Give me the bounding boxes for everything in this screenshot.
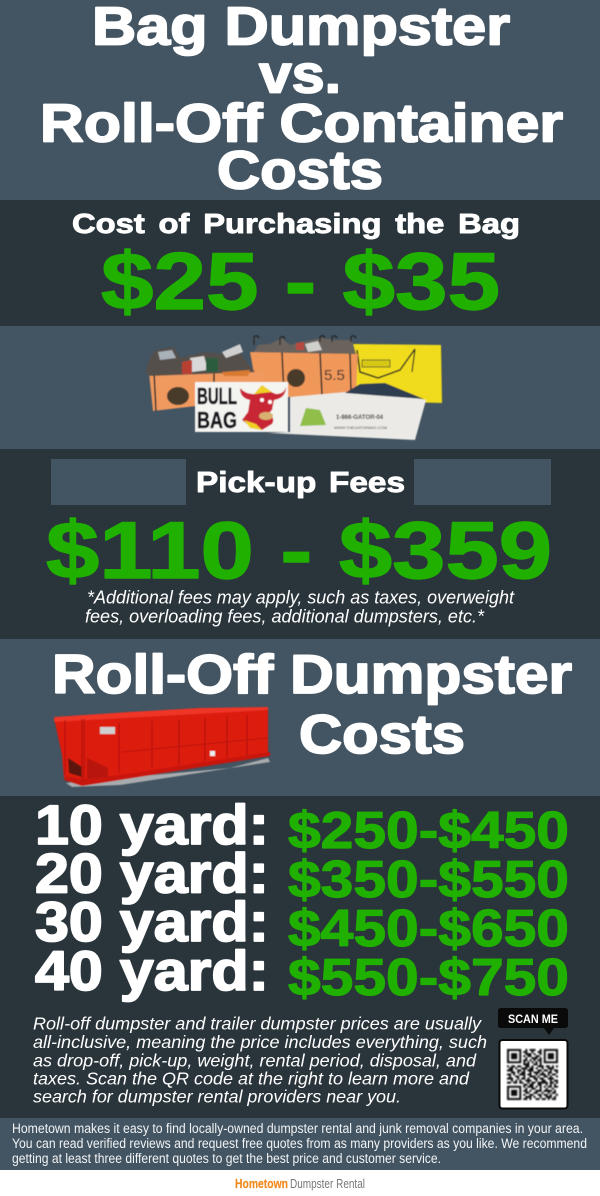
bag handles and contents	[254, 338, 356, 354]
heading: bag dumpster vs roll-off container costs: vs.	[259, 44, 341, 104]
note: additional fees	[85, 588, 515, 626]
row: 20 yard: $350-$550	[288, 851, 569, 909]
image: collection of dumpster bags: 5.5	[324, 367, 345, 384]
panel: bag photo band	[0, 326, 600, 449]
text block: roll-off explanation: Roll-off dumpster and trailer dumpster prices are usually	[33, 1014, 482, 1034]
price: bag cost: $25 - $35	[101, 237, 500, 327]
row: 40 yard	[35, 939, 569, 1007]
row: 10 yard: $250-$450	[288, 802, 569, 860]
heading: cost of purchasing: Cost of Purchasing the Bag	[72, 208, 520, 239]
image: collection of dumpster bags: BAG	[197, 407, 237, 433]
image: red roll-off dumpster	[54, 707, 270, 787]
text block: roll-off explanation: search for dumpster rental providers near you.	[33, 1086, 401, 1106]
panel: pick-up fees	[0, 449, 600, 639]
row: 10 yard	[35, 793, 569, 860]
text block: roll-off explanation: all-inclusive, meaning the price includes everything, such	[33, 1032, 487, 1052]
bull bag logo	[195, 382, 288, 432]
junk pile	[146, 347, 255, 376]
panel: title band	[0, 0, 600, 200]
note: additional fees: *Additional fees may apply, such as taxes, overweight	[87, 588, 515, 608]
text block: roll-off explanation: taxes. Scan the QR code at the right to learn more and	[33, 1068, 470, 1088]
row: 30 yard: $450-$650	[288, 900, 569, 958]
text block: roll-off explanation	[33, 1014, 487, 1106]
qr code	[500, 1040, 568, 1108]
decorative box right	[414, 459, 551, 505]
text block: about hometown	[12, 1121, 587, 1166]
panel: cost of purchasing the bag	[0, 200, 600, 327]
logo: hometown dumpster rental: Dumpster Rental	[290, 1176, 365, 1191]
row: 40 yard: 40 yard:	[35, 939, 269, 1002]
orange bag left	[149, 372, 264, 411]
heading: roll-off dumpster costs: Costs	[299, 703, 465, 765]
row: 10 yard: 10 yard:	[35, 793, 269, 856]
heading: pick-up fees: Pick-up Fees	[196, 467, 405, 499]
image: collection of dumpster bags	[146, 336, 442, 440]
image: collection of dumpster bags: 1-866-GATOR-04	[336, 415, 384, 421]
panel: roll-off dumpster costs	[0, 639, 600, 796]
scan me bubble: SCAN ME	[508, 1014, 558, 1026]
panel: hometown footer text	[0, 1118, 600, 1170]
row: 30 yard: 30 yard:	[35, 890, 269, 953]
orange bag right	[250, 352, 358, 397]
logo: hometown dumpster rental: Hometown	[235, 1176, 288, 1191]
note: additional fees: fees, overloading fees, additional dumpsters, etc.*	[85, 606, 485, 626]
heading: bag dumpster vs roll-off container costs	[40, 0, 563, 200]
image: collection of dumpster bags: WWW.THEGATORBAG.COM	[334, 425, 387, 430]
decorative box left	[51, 459, 186, 505]
logo: hometown dumpster rental	[235, 1176, 365, 1191]
heading: bag dumpster vs roll-off container costs: Costs	[217, 140, 383, 200]
panel: roll-off price list	[0, 793, 600, 1118]
icon: scan me QR code	[498, 1008, 568, 1108]
heading: roll-off dumpster costs	[52, 643, 572, 765]
yellow bag	[333, 344, 442, 403]
row: 30 yard	[35, 890, 569, 958]
row: 20 yard: 20 yard:	[35, 842, 269, 904]
heading: roll-off dumpster costs: Roll-Off Dumpster	[52, 643, 572, 705]
white gator bag	[268, 392, 426, 440]
row: 20 yard	[35, 842, 569, 909]
text block: roll-off explanation: as drop-off, pick-up, weight, rental period, disposal, and	[33, 1050, 477, 1070]
image: collection of dumpster bags: BULL	[197, 383, 237, 409]
row: 40 yard: $550-$750	[288, 949, 569, 1007]
text block: about hometown: getting at least three different quotes to get the best price and customer service.	[12, 1151, 441, 1166]
price: pick-up fees: $110 - $359	[46, 506, 552, 596]
heading: bag dumpster vs roll-off container costs: Roll-Off Container	[40, 94, 563, 154]
